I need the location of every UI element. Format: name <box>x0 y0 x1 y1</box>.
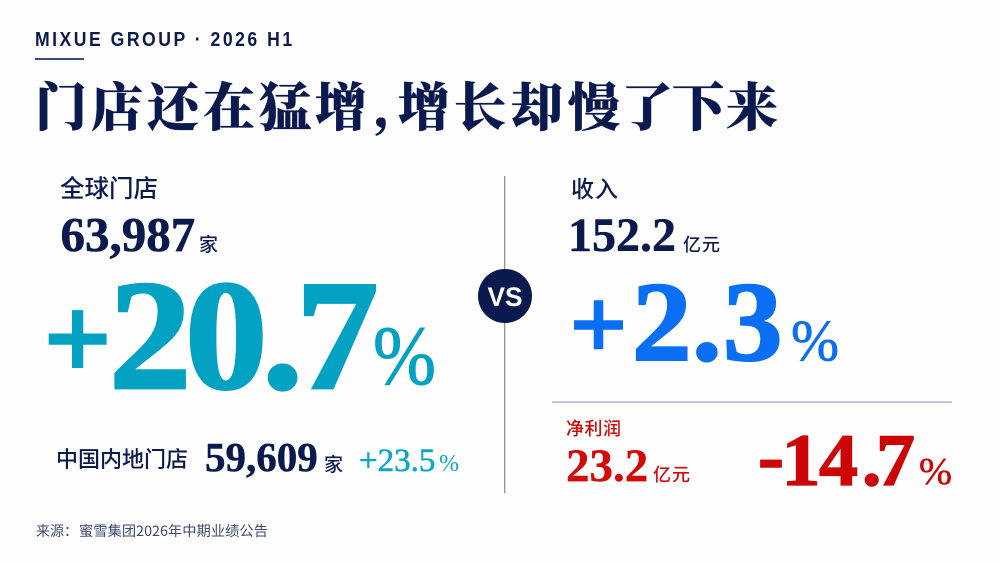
panel: revenue <box>568 170 839 385</box>
panel: net profit <box>566 412 952 502</box>
revenue value: 152.2 <box>568 209 676 262</box>
horizontal divider <box>552 402 952 403</box>
revenue label: 收入 <box>571 170 618 204</box>
revenue value: 亿元 <box>683 231 720 257</box>
net profit change: % <box>919 451 952 493</box>
net profit change: 14.7 <box>782 420 915 502</box>
revenue growth: 2.3 <box>632 261 782 385</box>
revenue growth <box>570 261 839 385</box>
mainland stores row: 家 <box>324 450 343 477</box>
global stores growth: % <box>373 310 436 403</box>
net profit change <box>758 412 952 502</box>
source note: 来源： <box>36 521 78 541</box>
net profit change: - <box>758 412 784 499</box>
mainland stores row: +23.5 <box>359 443 435 479</box>
net profit value: 亿元 <box>653 461 690 487</box>
global stores count: 63,987 <box>60 207 195 262</box>
mainland stores row <box>56 434 459 480</box>
vs divider: VS <box>488 282 522 312</box>
panel: stores <box>44 170 459 480</box>
source note: 蜜雪集团2026年中期业绩公告 <box>79 520 268 541</box>
header label: MIXUE GROUP · 2026 H1 <box>35 29 292 51</box>
net profit label: 净利润 <box>566 415 621 441</box>
global stores count: 家 <box>199 230 218 257</box>
revenue growth: % <box>791 308 839 373</box>
global stores growth: + <box>44 273 111 404</box>
title: 门店还在猛增,增长却慢了下来 <box>35 66 778 141</box>
global stores label: 全球门店 <box>60 170 158 205</box>
mainland stores row: 59,609 <box>205 434 318 480</box>
global stores growth <box>44 249 436 422</box>
mainland stores row: % <box>439 451 459 477</box>
net profit value: 23.2 <box>566 440 648 492</box>
global stores growth: 20.7 <box>109 249 378 422</box>
net profit value <box>566 440 690 492</box>
vs divider <box>478 176 532 493</box>
revenue growth: + <box>570 269 627 380</box>
mainland stores row: 中国内地门店 <box>56 442 188 474</box>
